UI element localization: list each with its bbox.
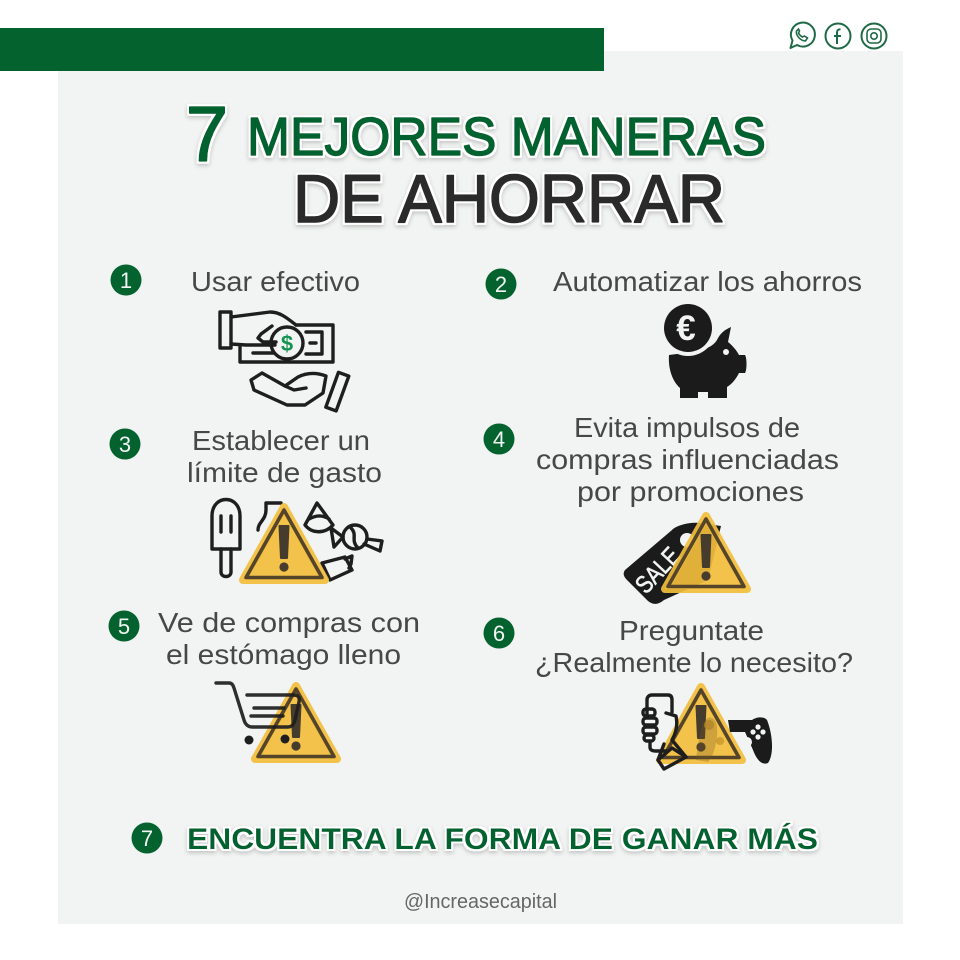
text 4: Evita impulsos de [574, 412, 800, 443]
text 3: Establecer un [192, 425, 370, 456]
item 4 [484, 412, 839, 604]
badge 2: 2 [495, 272, 507, 297]
text 1: Usar efectivo [191, 266, 360, 297]
item 7 [132, 822, 818, 856]
badge 1: 1 [120, 268, 132, 293]
green header bar [0, 28, 604, 71]
warning triangle [660, 687, 742, 760]
badge 5 [108, 610, 140, 642]
badge 6: 6 [493, 621, 505, 646]
icon: hand giving cash to hand: $ [281, 331, 293, 356]
text 6: ¿Realmente lo necesito? [535, 647, 853, 678]
text 4: compras influenciadas [536, 444, 839, 475]
text 2: Automatizar los ahorros [553, 266, 862, 297]
badge 1 [110, 264, 142, 296]
icon: whatsapp [790, 23, 815, 48]
text 4: por promociones [577, 476, 804, 507]
badge 6 [484, 618, 514, 648]
warning triangle [243, 507, 325, 580]
text 5: Ve de compras con [158, 607, 420, 638]
badge 4 [484, 424, 514, 454]
badge 2 [486, 268, 516, 300]
item 6 [484, 615, 853, 769]
badge 7: 7 [141, 826, 153, 851]
item 2 [486, 266, 862, 398]
text 4 [536, 412, 839, 507]
icon: piggy bank with euro coin [660, 300, 746, 398]
text 5: el estómago lleno [166, 639, 401, 670]
text 5 [158, 607, 420, 670]
warning triangle [255, 686, 337, 759]
icon: instagram [862, 24, 886, 48]
title [186, 90, 766, 237]
icon: phone and gamepad with warning [643, 687, 772, 769]
text 3 [187, 425, 382, 488]
item 1 [110, 264, 360, 411]
text 3: límite de gasto [187, 457, 382, 488]
text 7: ENCUENTRA LA FORMA DE GANAR MÁS [187, 822, 818, 856]
badge 5: 5 [118, 614, 130, 639]
item 5 [108, 607, 420, 759]
badge 3: 3 [119, 432, 131, 457]
warning triangle [665, 516, 747, 589]
title line 2: DE AHORRAR [293, 161, 725, 237]
text 6: Preguntate [619, 615, 764, 646]
title numeral 7: 7 [186, 90, 228, 178]
icon: sale tag with warning [624, 516, 747, 604]
icon: sweets with warning [212, 500, 382, 580]
badge 3 [110, 428, 140, 460]
title line 1: MEJORES MANERAS [247, 107, 766, 167]
icon: facebook [826, 24, 850, 48]
badge 7 [132, 822, 162, 854]
icon: shopping cart with warning [216, 683, 337, 759]
footer handle: @Increasecapital [404, 891, 557, 913]
icon: hand giving cash to hand [220, 312, 349, 411]
icon: piggy bank with euro coin: € [676, 309, 696, 348]
item 3 [110, 425, 382, 580]
text 6 [535, 615, 853, 678]
badge 4: 4 [493, 427, 505, 452]
social icons [790, 23, 886, 48]
icon: sale tag with warning: SALE [630, 542, 686, 599]
